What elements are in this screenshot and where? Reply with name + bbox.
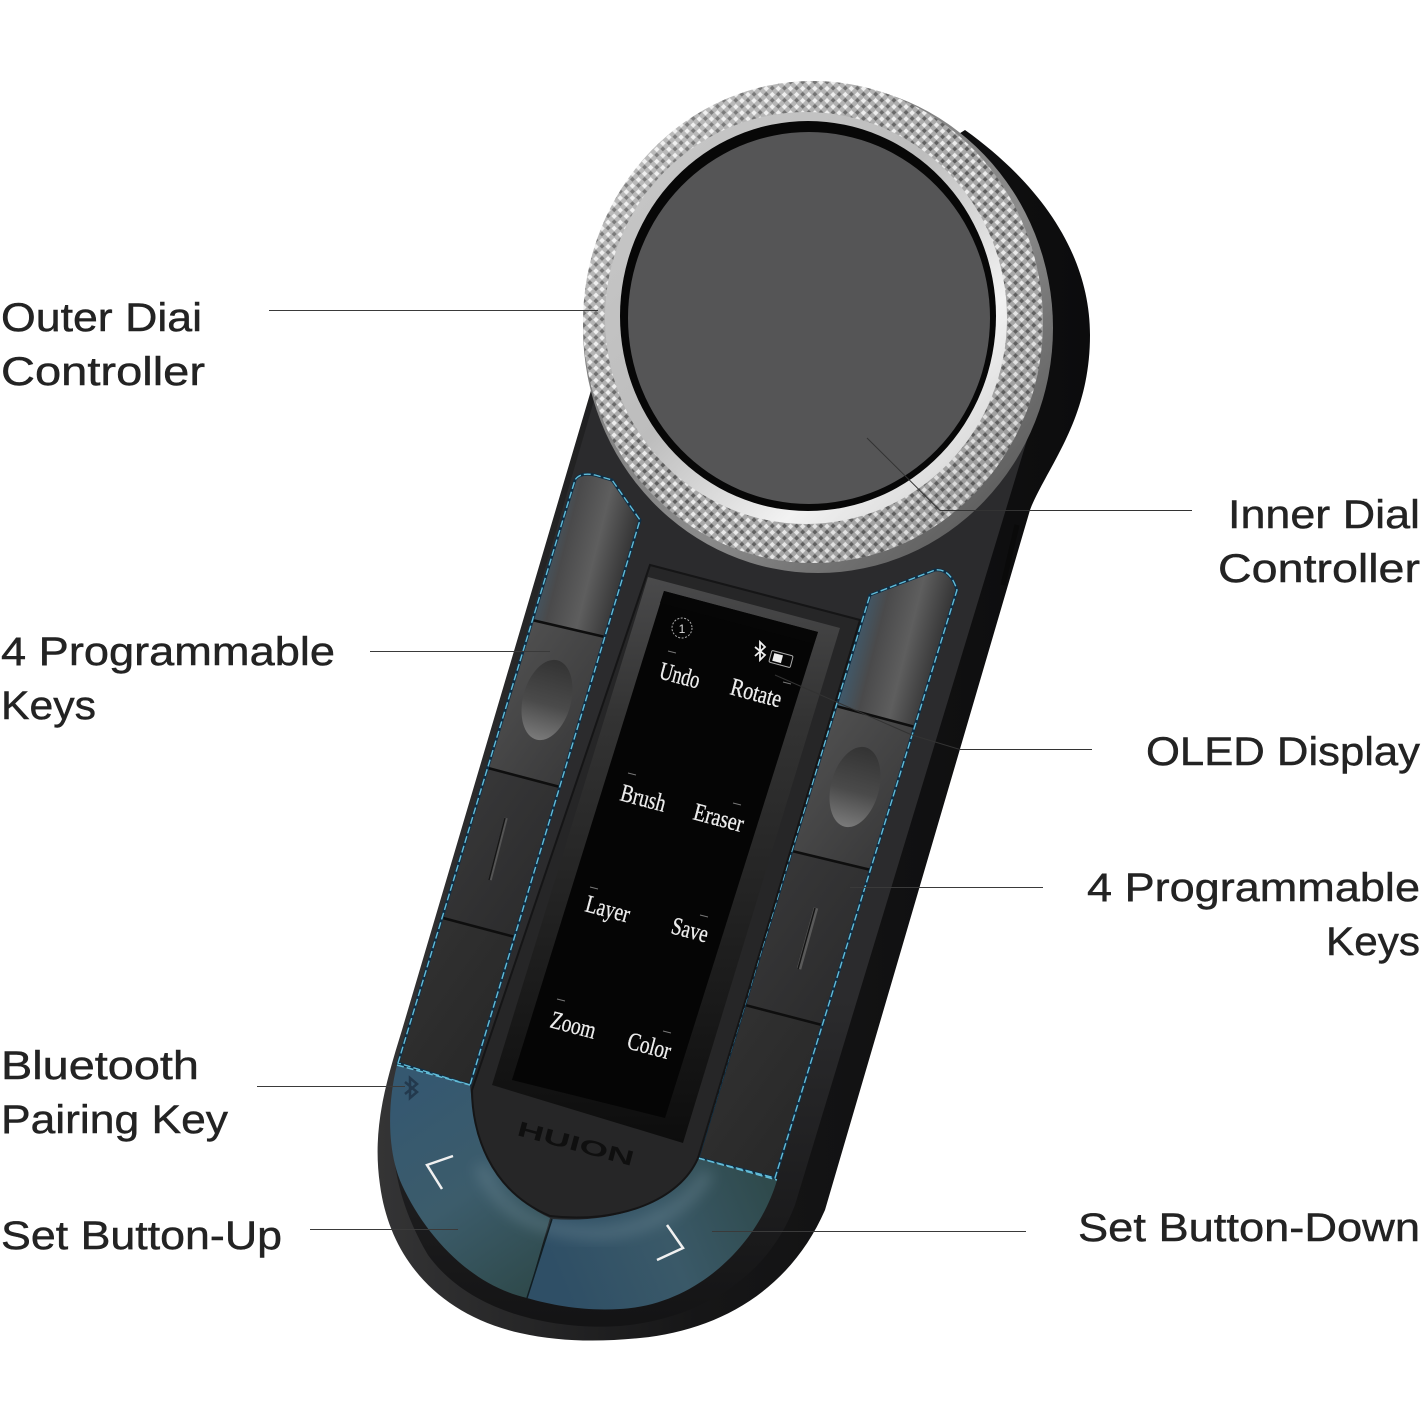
set up line	[310, 1228, 458, 1230]
icon: battery	[769, 650, 793, 668]
left key 1	[532, 474, 640, 637]
screen labels: Zoom	[547, 1007, 599, 1045]
label: left programmable keys: 4 Programmable	[1, 630, 335, 674]
screen labels: Save	[668, 913, 711, 948]
screen labels: Rotate	[727, 674, 785, 713]
dashed bottom edges	[397, 1065, 777, 1180]
label: inner dial controller	[1218, 493, 1420, 591]
icon: profile number	[672, 618, 692, 638]
screen labels: Color	[624, 1028, 674, 1065]
label: left programmable keys	[1, 630, 335, 728]
screen top dim frame	[660, 591, 818, 644]
left arrow	[427, 1156, 453, 1189]
outer dial knurled ring	[583, 81, 1043, 563]
screen labels: Undo	[656, 658, 703, 694]
label: outer dial controller: Outer Diai	[1, 296, 202, 340]
label: right programmable keys	[1087, 866, 1420, 964]
right key outline	[698, 570, 957, 1178]
leader lines	[257, 310, 1192, 1232]
right key dividers	[745, 706, 915, 1025]
display bezel	[492, 577, 840, 1143]
inner dial line	[867, 438, 1192, 510]
left key 4	[398, 918, 515, 1085]
right keys line	[850, 886, 1043, 888]
screen labels: Eraser	[690, 799, 747, 838]
label: inner dial controller: Inner Dial	[1228, 493, 1420, 537]
label: inner dial controller: Controller	[1218, 547, 1420, 591]
black gap ring	[620, 121, 996, 511]
device: dial controller	[378, 81, 1090, 1341]
knurl highlight	[583, 81, 1043, 563]
dial side wall	[583, 83, 1053, 573]
set button down	[527, 1158, 777, 1309]
screen labels	[547, 651, 791, 1065]
label: oled display: OLED Display	[1146, 730, 1420, 774]
set down line	[712, 1230, 1026, 1232]
set button up	[390, 1065, 550, 1298]
label: left programmable keys: Keys	[1, 684, 96, 728]
side slot	[1003, 525, 1017, 585]
left key column	[398, 474, 640, 1085]
left dashed outline	[398, 474, 640, 1085]
icon: bluetooth pairing	[405, 1078, 417, 1098]
label: right programmable keys: 4 Programmable	[1087, 866, 1420, 910]
set button split	[527, 1219, 552, 1298]
brand logo: HUION	[515, 1118, 637, 1171]
label: bluetooth pairing key: Pairing Key	[1, 1098, 228, 1142]
label: bluetooth pairing key	[1, 1044, 228, 1142]
left key 3 with slit	[443, 768, 560, 937]
left keys line	[370, 650, 550, 652]
oled line	[775, 675, 1092, 750]
left key outline dashed	[398, 474, 640, 1085]
right arrow	[657, 1225, 683, 1260]
label: outer dial controller: Controller	[1, 350, 205, 394]
outer dial line	[269, 310, 598, 312]
set button ridge highlight	[480, 1165, 708, 1233]
dial assembly	[583, 81, 1053, 573]
left key dividers	[443, 620, 605, 937]
right key 3 with slit	[745, 851, 871, 1025]
right key 4	[698, 1005, 822, 1178]
right key 2 with oval dimple	[792, 706, 915, 870]
bluetooth line	[257, 1086, 405, 1088]
label: bluetooth pairing key: Bluetooth	[1, 1044, 199, 1088]
device face	[393, 380, 1030, 1327]
label: right programmable keys: Keys	[1326, 920, 1420, 964]
label: set button up: Set Button-Up	[1, 1214, 282, 1258]
icon: bluetooth	[755, 642, 765, 660]
right key 1	[836, 570, 957, 727]
chrome band	[605, 112, 1007, 524]
display housing	[472, 565, 860, 1218]
right dashed outline	[698, 570, 957, 1178]
label: set button down: Set Button-Down	[1078, 1206, 1420, 1250]
OLED screen	[512, 591, 818, 1118]
right key column	[698, 570, 957, 1178]
device shell	[378, 130, 1090, 1341]
label: outer dial controller	[1, 296, 205, 394]
icon: profile number: 1	[679, 622, 686, 636]
inner dial disc	[628, 132, 990, 504]
screen labels: Brush	[617, 780, 669, 818]
left key 2 with oval dimple	[488, 620, 605, 787]
screen labels: Layer	[582, 891, 633, 929]
